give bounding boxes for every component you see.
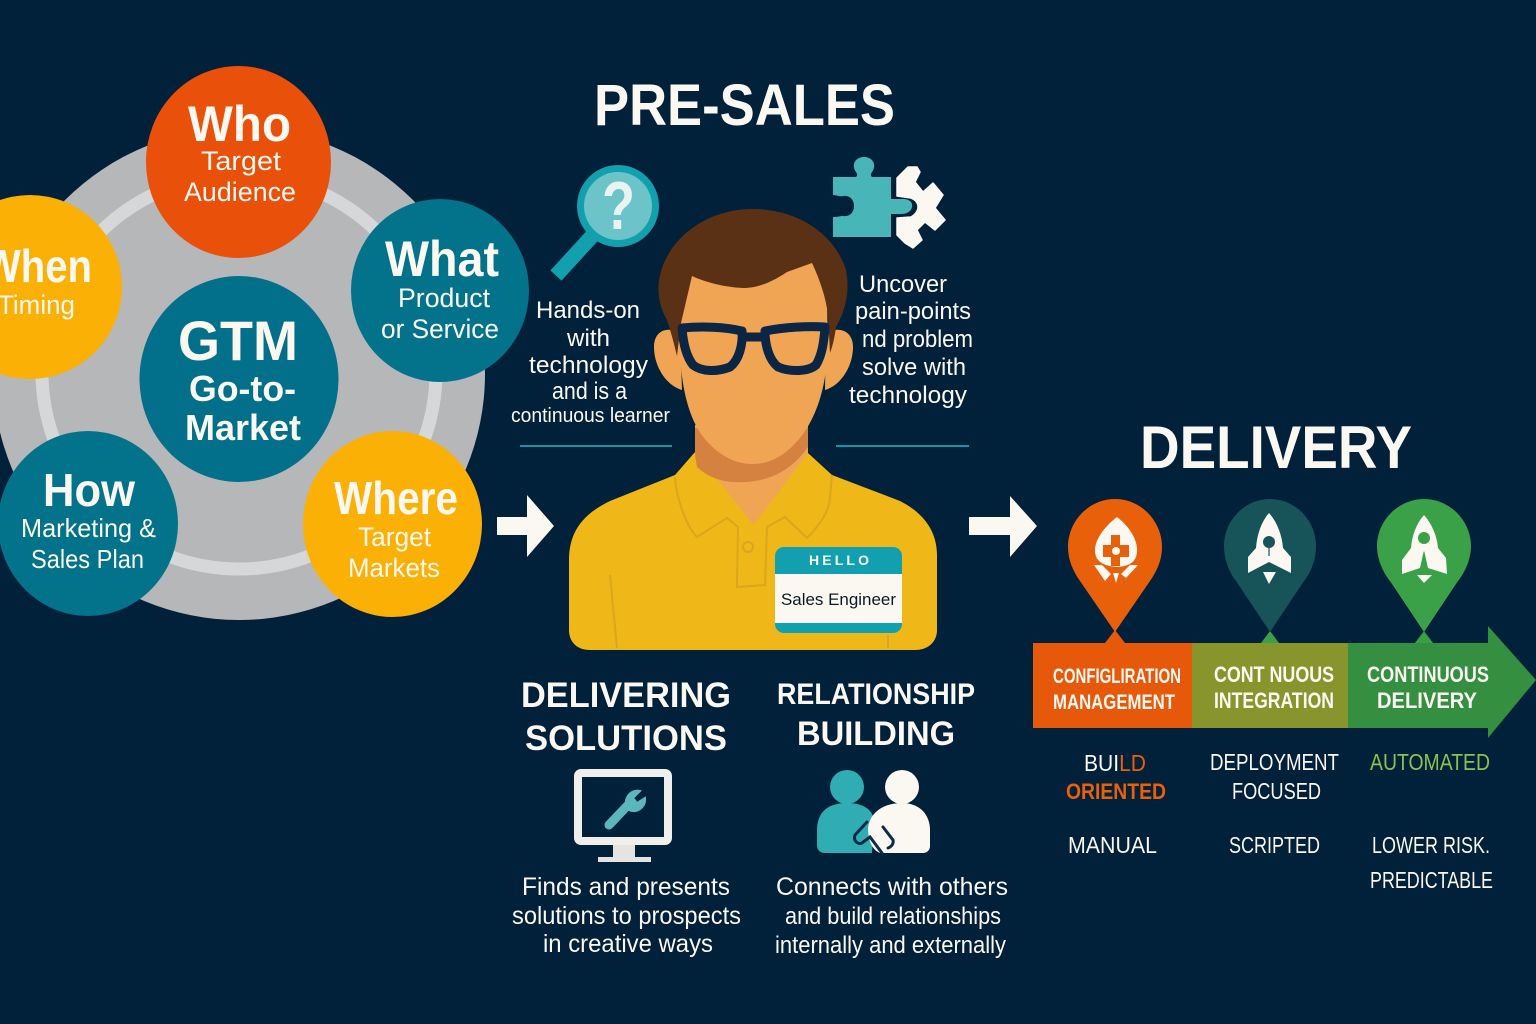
column: automated xyxy=(1370,749,1493,893)
circle: How xyxy=(0,431,178,616)
text: connects with others: internally and externally xyxy=(775,932,1006,959)
circle: GTM centre xyxy=(140,276,338,482)
circle: Who: Audience xyxy=(184,177,296,207)
column: automated: PREDICTABLE xyxy=(1370,867,1493,893)
icon: monitor with wrench xyxy=(578,773,668,862)
text: hands-on: and is a xyxy=(552,378,628,405)
arrow: GTM to pre-sales xyxy=(497,495,554,557)
segment: continuous integration xyxy=(1192,643,1348,728)
circle: What: What xyxy=(385,231,499,287)
circle: Where: Where xyxy=(334,472,458,524)
grey wheel disc xyxy=(0,128,485,620)
column: deployment focused: SCRIPTED xyxy=(1229,832,1320,858)
heading: delivering solutions: DELIVERING xyxy=(521,676,731,715)
ears xyxy=(654,330,853,390)
circle: What: or Service xyxy=(381,314,499,344)
heading: delivering solutions xyxy=(521,676,731,758)
text: hands-on: continuous learner xyxy=(511,405,670,427)
text: connects with others: Connects with others xyxy=(776,873,1008,901)
segment: configuration management: MANAGEMENT xyxy=(1053,691,1175,714)
text: hands-on xyxy=(511,297,670,427)
pin: configuration management xyxy=(1068,499,1162,632)
text: finds and presents: Finds and presents xyxy=(522,873,730,901)
name tag xyxy=(775,547,902,633)
icon: magnifying glass with question mark: ? xyxy=(602,168,635,244)
figure: sales engineer xyxy=(569,209,937,650)
heading: delivering solutions: SOLUTIONS xyxy=(525,719,727,758)
pin: continuous delivery xyxy=(1377,499,1471,632)
column: automated: AUTOMATED xyxy=(1370,749,1490,775)
heading: DELIVERY: DELIVERY xyxy=(1140,414,1412,481)
text: uncover pain-points: solve with xyxy=(862,354,966,381)
name tag: Sales Engineer xyxy=(781,590,896,609)
connector triangles xyxy=(1105,630,1433,643)
pin: continuous integration xyxy=(1224,499,1316,632)
column: build oriented: MANUAL xyxy=(1068,832,1157,858)
column: build oriented: BUILD xyxy=(1084,750,1146,776)
text: finds and presents xyxy=(512,873,741,958)
heading: relationship building: BUILDING xyxy=(797,715,955,753)
shirt xyxy=(569,452,937,650)
segment: continuous delivery arrow xyxy=(1348,626,1536,738)
panel: delivery pipeline xyxy=(1033,499,1536,738)
circle: Who xyxy=(146,66,331,258)
text: connects with others xyxy=(775,873,1008,959)
shirt details xyxy=(610,475,888,648)
neck shadow xyxy=(695,428,808,482)
heading: relationship building xyxy=(777,678,975,753)
circle: How: How xyxy=(43,464,135,516)
neck xyxy=(695,425,808,545)
text: hands-on: Hands-on xyxy=(536,297,640,324)
icon: puzzle pieces xyxy=(833,157,945,248)
circle: What xyxy=(351,199,529,382)
glasses xyxy=(682,327,825,371)
heading: PRE-SALES: PRE-SALES xyxy=(594,73,895,138)
text: uncover pain-points: nd problem xyxy=(862,326,973,353)
circle: How: Marketing & xyxy=(21,513,156,543)
text: hands-on: with xyxy=(566,325,610,352)
segment: configuration management: CONFIGLIRATION xyxy=(1053,665,1181,688)
icon: two people shaking hands xyxy=(817,770,930,853)
text: finds and presents: solutions to prospects xyxy=(512,902,741,930)
column: build oriented: ORIENTED xyxy=(1066,779,1166,804)
arrow: pre-sales to delivery xyxy=(969,496,1037,557)
segment: continuous delivery arrow: CONTINUOUS xyxy=(1367,662,1489,687)
segment: configuration management xyxy=(1033,643,1192,728)
circle: Who: Who xyxy=(188,96,291,152)
circle: Who: Target xyxy=(201,146,282,176)
hair xyxy=(658,209,848,356)
icon: magnifying glass with question mark xyxy=(561,165,659,270)
segment: continuous delivery arrow: DELIVERY xyxy=(1377,688,1477,713)
column: deployment focused: DEPLOYMENT xyxy=(1210,749,1339,775)
segment: continuous integration: CONT NUOUS xyxy=(1214,662,1334,687)
text: hands-on: technology xyxy=(529,352,648,379)
column: deployment focused xyxy=(1210,749,1339,858)
circle: Where xyxy=(303,431,482,617)
text: uncover pain-points xyxy=(849,271,973,409)
name tag: HELLO xyxy=(809,552,869,568)
text: uncover pain-points: pain-points xyxy=(855,298,971,325)
circle: When xyxy=(0,195,122,379)
segment: continuous integration: INTEGRATION xyxy=(1214,688,1334,713)
circle: Where: Markets xyxy=(348,553,440,583)
column: build oriented xyxy=(1066,750,1166,858)
heading: relationship building: RELATIONSHIP xyxy=(777,678,975,711)
circle: How: Sales Plan xyxy=(31,544,144,574)
column: deployment focused: FOCUSED xyxy=(1232,778,1321,804)
circle: Where: Target xyxy=(358,522,431,552)
text: connects with others: and build relationships xyxy=(785,903,1001,930)
circle: GTM centre: GTM xyxy=(178,309,298,372)
circle: When: Timing xyxy=(0,290,75,320)
text: uncover pain-points: technology xyxy=(849,382,967,409)
text: uncover pain-points: Uncover xyxy=(859,271,947,298)
circle: What: Product xyxy=(398,283,490,313)
column: automated: LOWER RISK. xyxy=(1372,832,1490,858)
face xyxy=(680,255,828,464)
divider lines xyxy=(520,445,969,447)
panel: GTM wheel xyxy=(0,66,529,620)
circle: GTM centre: Market xyxy=(185,407,301,448)
circle: GTM centre: Go-to- xyxy=(189,368,296,409)
text: finds and presents: in creative ways xyxy=(543,930,713,958)
